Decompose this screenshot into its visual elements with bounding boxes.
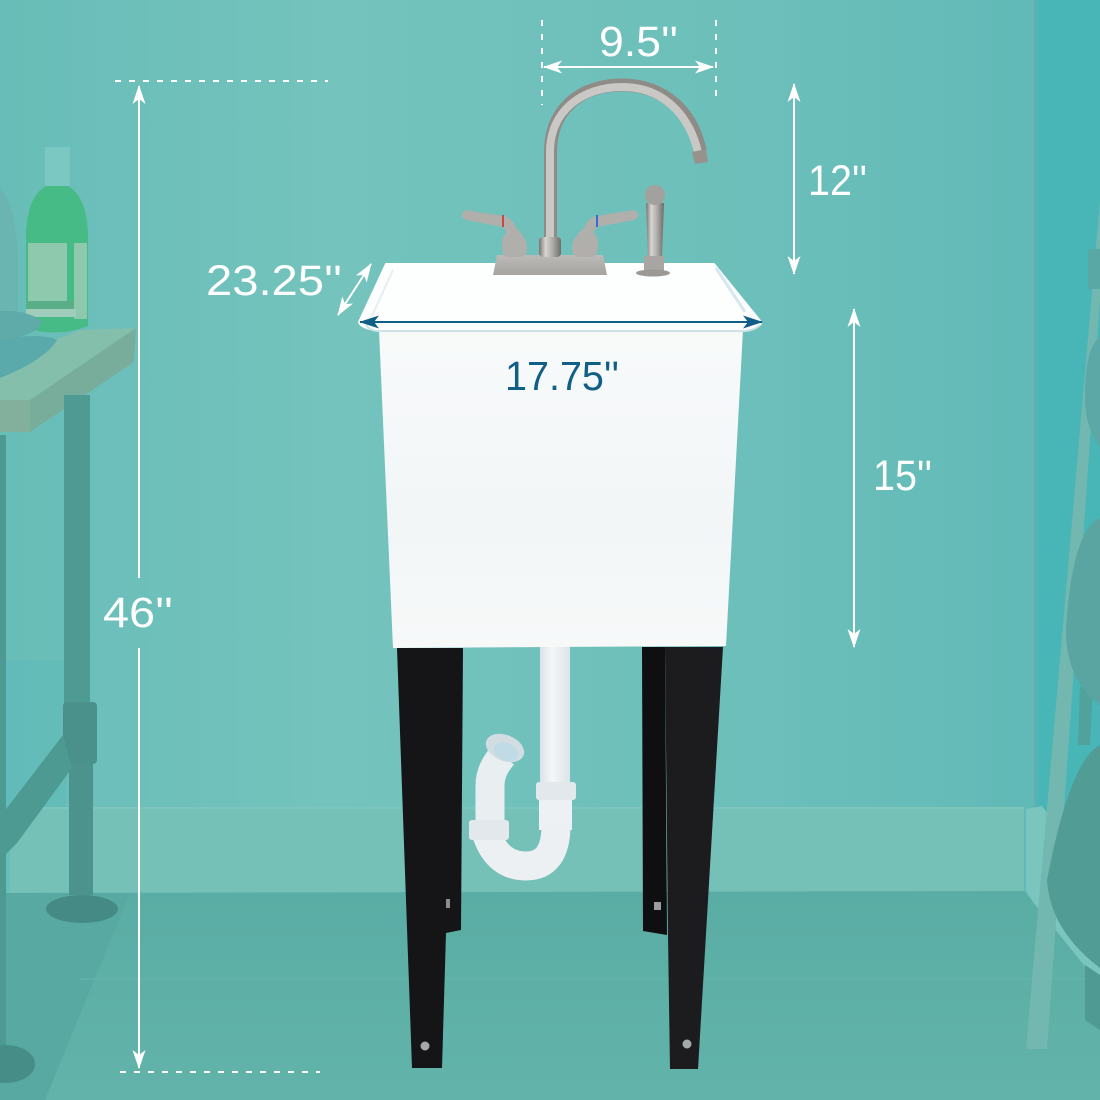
sink: faucet xyxy=(462,85,708,276)
dimension: 15 inch tub depth: 15'' xyxy=(873,452,932,500)
dimension: 23.25 inch depth xyxy=(206,257,371,315)
dimension: 12 inch faucet height: 12'' xyxy=(808,157,867,205)
dimension: 23.25 inch depth: 23.25'' xyxy=(206,257,342,305)
background: side table and bottle xyxy=(0,147,136,1083)
dimension: 46 inch height: 46'' xyxy=(103,589,173,637)
dimension: 17.75 inch width: 17.75'' xyxy=(505,353,619,399)
sink: drain P-trap xyxy=(469,645,576,866)
dimension: 9.5 inch faucet reach: 9.5'' xyxy=(599,18,678,66)
sink: tub body xyxy=(359,264,761,648)
background: ladder shelf xyxy=(1026,200,1100,1049)
sink: legs xyxy=(397,647,723,1069)
